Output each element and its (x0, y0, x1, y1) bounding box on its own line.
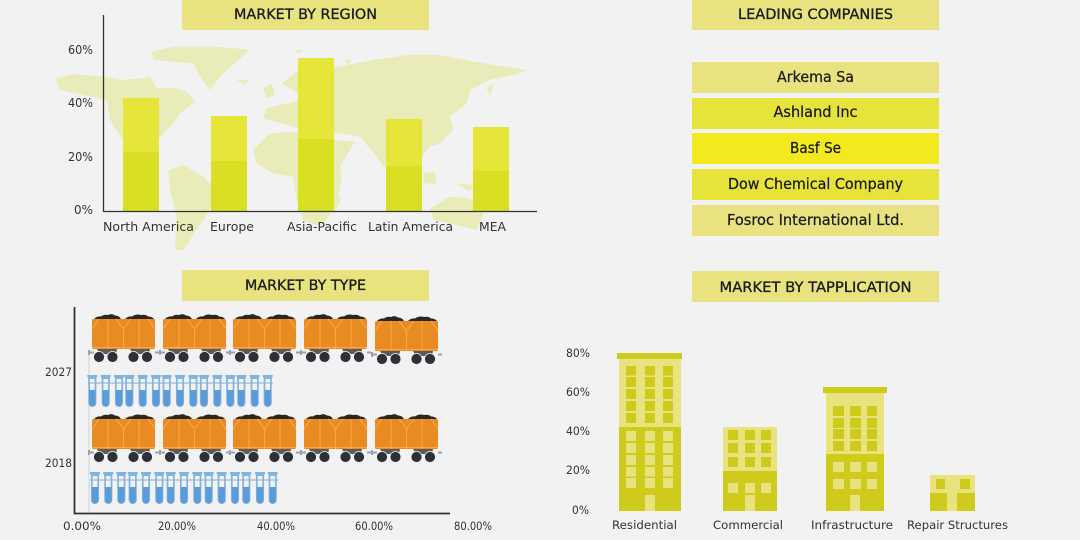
company: Arkema Sa (692, 62, 939, 93)
x axis labels: type: 0.00% (63, 519, 101, 533)
building: commercial (723, 427, 777, 511)
x axis labels: type: 40.00% (257, 519, 295, 533)
x axis labels: application: Infrastructure (811, 518, 893, 532)
x axis labels: region: Latin America (368, 219, 453, 234)
heading: market by type (182, 270, 429, 301)
bar chart: region (104, 15, 537, 212)
panel: market by region (55, 0, 537, 250)
panel: leading companies (692, 0, 939, 236)
x axis labels: type: 20.00% (158, 519, 196, 533)
company: Dow Chemical Company: Dow Chemical Company (728, 175, 903, 193)
y axis labels: application: 20% (566, 463, 590, 477)
y axis labels: application: 0% (572, 503, 589, 517)
y axis labels: region: 20% (68, 149, 93, 164)
panel: market by application (566, 271, 1008, 532)
y axis labels: application (566, 346, 590, 517)
y axis labels: region: 60% (68, 42, 93, 57)
heading: market by region: MARKET BY REGION (234, 7, 377, 23)
x axis labels: region: Asia-Pacific (287, 219, 357, 234)
test tubes 2018 (90, 472, 278, 503)
x axis labels: type: 80.00% (454, 519, 492, 533)
test tubes 2027 (87, 375, 273, 406)
x axis labels: application: Repair Structures (907, 518, 1008, 532)
heading: market by tapplication (692, 271, 939, 302)
y axis labels: application: 80% (566, 346, 590, 360)
y axis labels: application: 40% (566, 424, 590, 438)
company: Fosroc International Ltd. (692, 205, 939, 236)
x axis labels: application (612, 518, 1008, 532)
x axis labels: type (63, 519, 492, 533)
heading: leading companies (692, 0, 939, 30)
company: Dow Chemical Company (692, 169, 939, 200)
x axis labels: region: North America (103, 219, 194, 234)
world map background (55, 47, 527, 250)
heading: leading companies: LEADING COMPANIES (738, 7, 893, 23)
axes: type (74, 307, 450, 514)
company: Ashland Inc (692, 98, 939, 129)
building: repair structures (930, 475, 975, 511)
year labels (45, 365, 72, 470)
x axis labels: type: 60.00% (355, 519, 393, 533)
x axis labels: application: Commercial (713, 518, 783, 532)
y axis labels: region (68, 42, 93, 217)
panel: market by type (45, 270, 492, 533)
heading: market by type: MARKET BY TYPE (245, 278, 366, 294)
year labels: 2018 (45, 456, 72, 470)
x axis labels: region: MEA (479, 219, 506, 234)
company: Arkema Sa: Arkema Sa (777, 68, 854, 86)
x axis labels: region (103, 219, 506, 234)
year labels: 2027 (45, 365, 72, 379)
company: Basf Se (692, 133, 939, 164)
wagons 2027 (88, 314, 442, 364)
company: Ashland Inc: Ashland Inc (774, 103, 858, 121)
x axis labels: application: Residential (612, 518, 677, 532)
building: infrastructure (823, 387, 887, 511)
heading: market by tapplication: MARKET BY TAPPLICATION (720, 280, 912, 296)
wagons 2018 (88, 414, 442, 462)
building: residential (617, 353, 682, 511)
y axis labels: region: 40% (68, 95, 93, 110)
company: Basf Se: Basf Se (790, 139, 841, 157)
y axis labels: application: 60% (566, 385, 590, 399)
company: Fosroc International Ltd.: Fosroc International Ltd. (727, 211, 904, 229)
x axis labels: region: Europe (210, 219, 254, 234)
heading: market by region (182, 0, 429, 30)
y axis labels: region: 0% (74, 202, 93, 217)
